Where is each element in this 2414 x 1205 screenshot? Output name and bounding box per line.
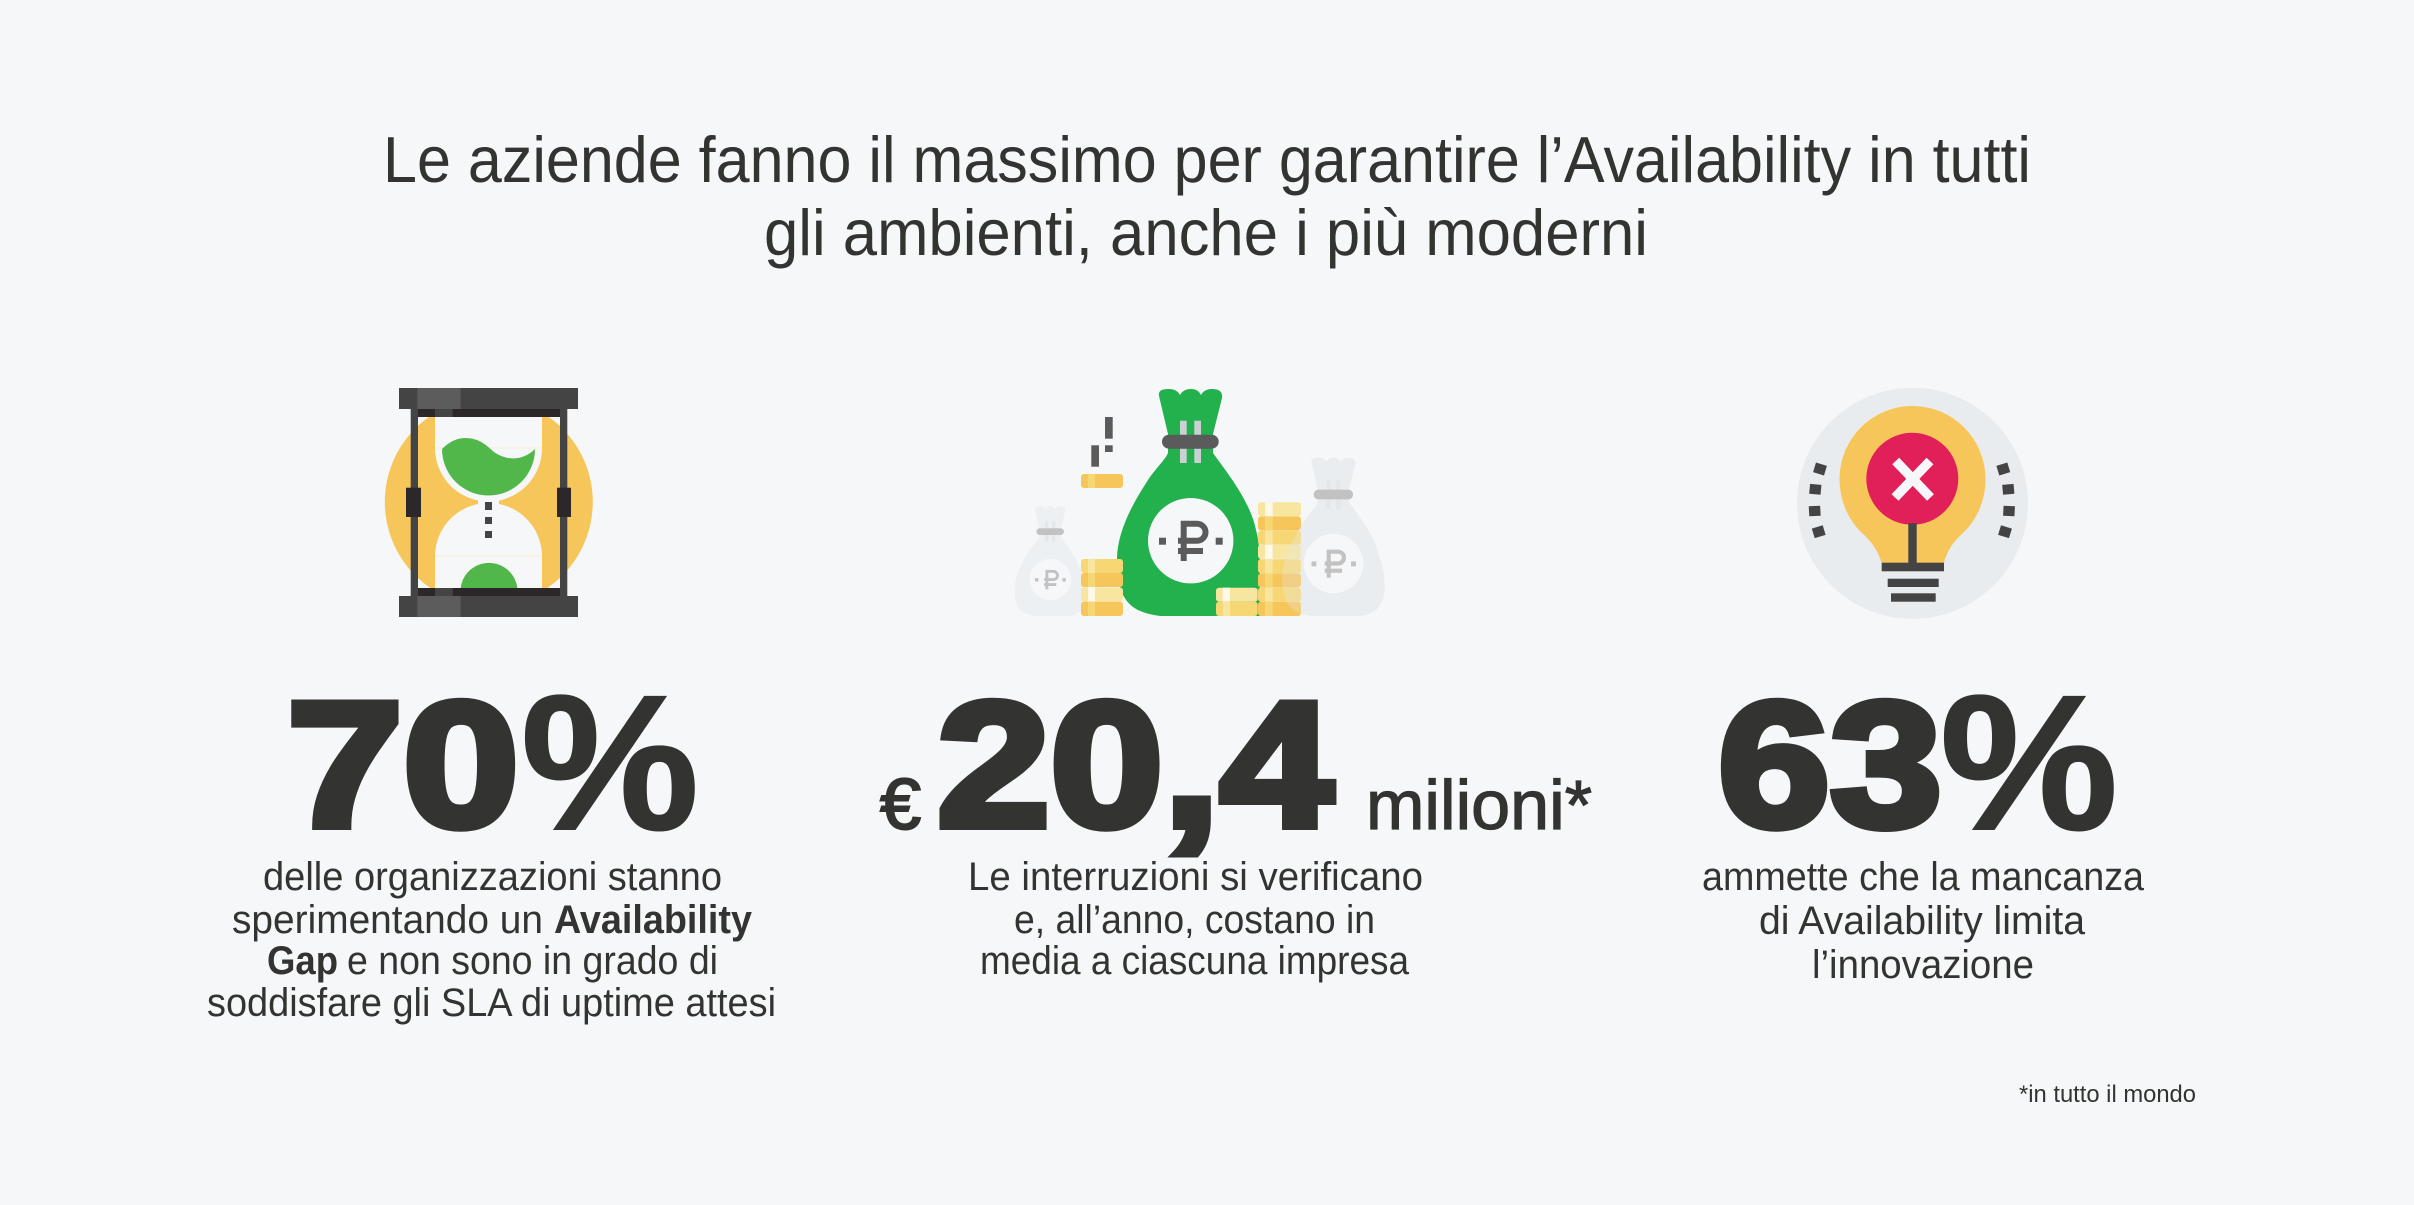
text: 63% description: ammette che la mancanza: [1702, 855, 2145, 899]
text: 63% description: l’innovazione: [1812, 943, 2034, 987]
middle coin stack: [1216, 588, 1258, 616]
text: 70% description: [207, 855, 776, 1025]
text: 70% description: Availability: [554, 898, 753, 942]
statistic: 63%: 63: [1718, 665, 1942, 864]
statistic: 70%: 70: [287, 665, 519, 864]
text: 20,4 description: media a ciascuna impresa: [980, 939, 1410, 983]
text: 20,4 description: e, all’anno, costano in: [1014, 898, 1375, 942]
text: 70% description: delle organizzazioni stanno: [263, 855, 722, 899]
title: gli ambienti, anche i più moderni: [764, 196, 1648, 269]
text: 70% description: sperimentando un: [232, 898, 543, 942]
statistic: 70%: %: [521, 655, 699, 870]
text: 20,4 description: [968, 855, 1423, 983]
icon: light bulb with cross: [1797, 388, 2028, 619]
text: 70% description: soddisfare gli SLA di uptime attesi: [207, 981, 776, 1025]
large grey money bag: [1282, 458, 1385, 616]
falling coin and dashes: [1081, 417, 1123, 488]
title: [383, 123, 2031, 269]
text: 63% description: di Availability limita: [1759, 899, 2086, 943]
text: 20,4 description: Le interruzioni si verificano: [968, 855, 1423, 899]
main green money bag: [1117, 389, 1260, 616]
icon: hourglass: [385, 388, 593, 617]
statistic: 70%: [287, 655, 699, 870]
small grey money bag: [1015, 506, 1086, 616]
statistic: 63%: [1718, 655, 2118, 870]
statistic: € 20,4 milioni: 20,4: [937, 665, 1333, 864]
statistic: 63%: %: [1940, 655, 2118, 870]
icon: money bags and coins: [1015, 389, 1385, 616]
left coin stack: [1081, 559, 1123, 616]
text: 70% description: e non sono in grado di: [347, 939, 718, 983]
statistic: € 20,4 milioni: €: [880, 765, 921, 845]
large grey bag overlay and symbol: [1282, 458, 1385, 616]
text: 70% description: Gap: [267, 939, 338, 983]
statistic: € 20,4 milioni: milioni*: [1366, 766, 1592, 844]
title: Le aziende fanno il massimo per garantire l’Availability in tutti: [383, 123, 2031, 196]
text: 63% description: [1702, 855, 2145, 987]
footnote: *in tutto il mondo: [2019, 1081, 2196, 1108]
statistic: € 20,4 milioni: [880, 665, 1592, 864]
right coin stack: [1258, 502, 1301, 616]
